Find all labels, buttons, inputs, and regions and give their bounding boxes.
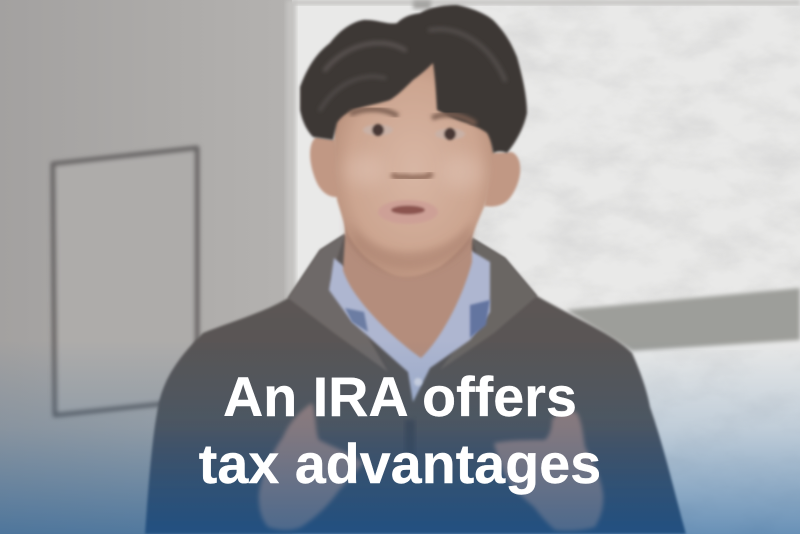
bottom blue gradient [0,340,800,534]
left eye [363,124,393,136]
jacket [145,234,686,534]
left hand [259,403,363,530]
zipper [405,420,415,480]
face [334,60,494,277]
shirt collar shadows [345,308,368,332]
mouth [378,200,438,224]
window beam [566,288,800,351]
presenter [145,5,686,534]
window [286,0,800,534]
nose [392,173,432,178]
right eye [435,128,465,140]
shirt [329,250,490,402]
cheek highlights [345,154,385,186]
right hand [494,411,603,531]
chin shadow [350,222,472,270]
neck [343,215,472,358]
hair highlights [320,29,505,110]
eyebrows [350,109,398,116]
caption text [199,366,601,495]
shirt button [414,378,422,386]
jacket collar left [288,234,388,372]
caption text: An IRA offers [223,366,577,428]
caption text: tax advantages [199,433,601,495]
jacket collar right [440,238,537,370]
ears [310,137,340,197]
hair [300,5,527,153]
picture frame [53,148,197,415]
wall [0,0,292,534]
